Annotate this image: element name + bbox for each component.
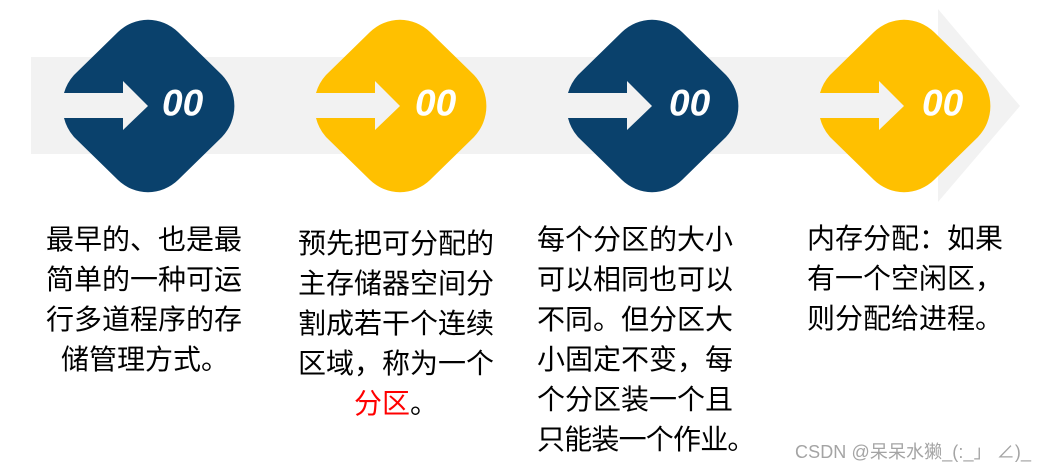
text block 3: 可以相同也可以 bbox=[537, 264, 733, 295]
text block 1: 简单的一种可运 bbox=[46, 264, 242, 295]
text block 2 bbox=[298, 228, 494, 419]
text block 3: 小固定不变，每 bbox=[537, 344, 733, 375]
text block 1: 行多道程序的存 bbox=[46, 304, 242, 335]
step 3 badge: 00 bbox=[669, 82, 711, 124]
text block 4: 内存分配：如果 bbox=[807, 223, 1003, 254]
step 3 badge bbox=[568, 20, 738, 192]
watermark: CSDN @呆呆水獭_(:_」 ∠)_ bbox=[795, 442, 1032, 463]
step 1 badge bbox=[64, 20, 234, 192]
text block 3: 不同。但分区大 bbox=[537, 304, 733, 335]
step 2 badge bbox=[316, 20, 486, 192]
text block 1 bbox=[46, 224, 242, 375]
step 4 badge: 00 bbox=[922, 82, 964, 124]
step 1 badge: 00 bbox=[162, 82, 204, 124]
step 4 badge bbox=[820, 20, 990, 192]
text block 2: 割成若干个连续 bbox=[298, 308, 494, 339]
text block 1: 储管理方式。 bbox=[61, 344, 229, 375]
text block 4: 有一个空闲区， bbox=[807, 263, 1003, 294]
background arrow bbox=[31, 9, 1020, 202]
text block 3: 每个分区的大小 bbox=[537, 224, 733, 255]
text block 2: 主存储器空间分 bbox=[298, 268, 494, 299]
text block 3: 只能装一个作业。 bbox=[537, 424, 755, 455]
text block 3 bbox=[537, 224, 755, 455]
text block 3: 个分区装一个且 bbox=[537, 384, 733, 415]
text block 2: 区域，称为一个 bbox=[298, 348, 494, 379]
text block 4 bbox=[807, 223, 1003, 334]
text block 1: 最早的、也是最 bbox=[46, 224, 242, 255]
step 2 badge: 00 bbox=[415, 82, 457, 124]
text block 4: 则分配给进程。 bbox=[807, 303, 1003, 334]
text block 2: 预先把可分配的 bbox=[298, 228, 494, 259]
text block 2: 分区。 bbox=[354, 388, 438, 419]
